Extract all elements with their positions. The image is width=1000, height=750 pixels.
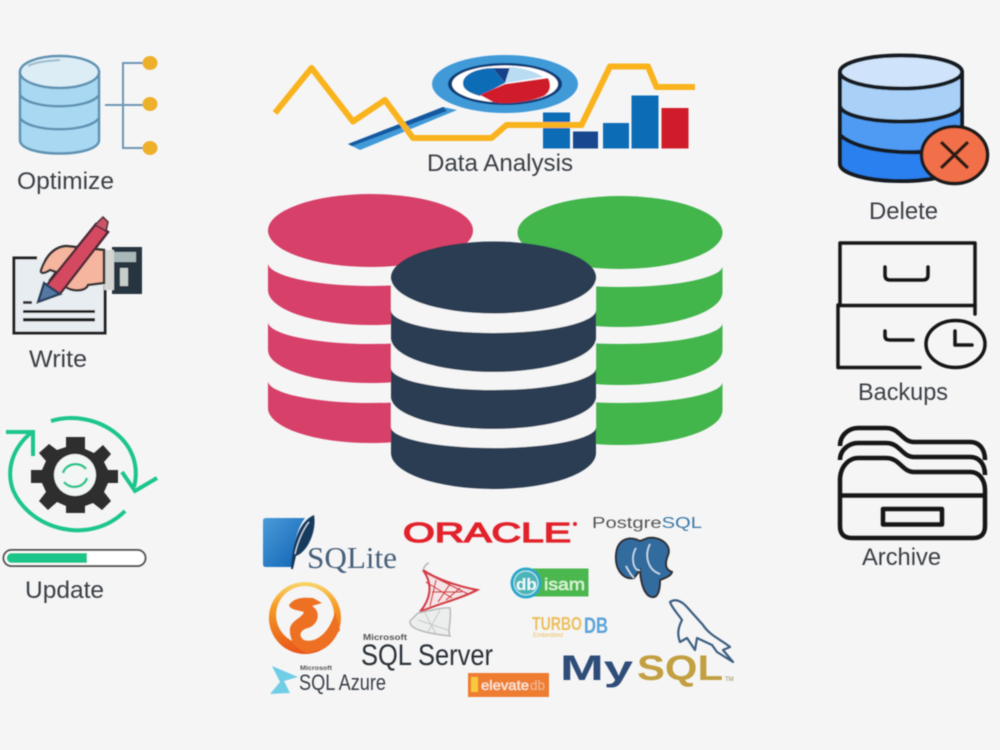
database: green cylinder <box>518 196 722 445</box>
logo: MySQL dolphin <box>670 600 733 662</box>
logo: SQLite: SQLite <box>307 540 397 575</box>
logo: ElevateDB <box>468 673 549 697</box>
logo: TurboDB: TURBO <box>532 614 582 634</box>
database: dark navy cylinder <box>391 242 596 489</box>
icon: delete database <box>840 56 988 184</box>
logo: MySQL <box>560 649 734 688</box>
logo: TurboDB <box>532 613 608 639</box>
logo: MySQL: My <box>560 649 634 688</box>
label: Archive: Archive <box>862 544 941 571</box>
icon: backups cabinet <box>838 243 985 368</box>
icon: write <box>14 217 142 333</box>
logo: TurboDB: Embedded <box>533 633 563 639</box>
logo: SQL Azure: SQL Azure <box>299 670 386 695</box>
icon: optimize database <box>20 56 158 155</box>
logo: SQL Azure <box>270 666 386 695</box>
logo: SQL Server mark <box>410 563 477 636</box>
logo: PostgreSQL <box>592 515 702 597</box>
logo: db isam <box>510 568 588 598</box>
logo: db isam: db <box>516 575 537 594</box>
label: Backups: Backups <box>858 379 948 406</box>
logo: MySQL: TM <box>725 677 734 683</box>
logo: SQLite <box>263 515 397 575</box>
logo: ElevateDB: db <box>530 677 545 693</box>
label: Optimize: Optimize <box>17 168 114 195</box>
logo: SQL Server wordmark: SQL Server <box>361 639 493 672</box>
logo: Firebird <box>269 582 341 654</box>
logo: MySQL: SQL <box>637 649 723 688</box>
logo: SQL Server wordmark: Microsoft <box>363 632 407 642</box>
logo: TurboDB: DB <box>584 613 608 638</box>
label: Delete: Delete <box>869 198 938 225</box>
logo: Oracle: ORACLE <box>403 517 571 548</box>
icon: update gear <box>6 418 157 530</box>
database: red cylinder <box>268 194 473 443</box>
progress bar <box>4 550 146 566</box>
label: Update: Update <box>25 577 104 604</box>
logo: Oracle <box>403 517 577 548</box>
logo: db isam: isam <box>544 575 585 594</box>
logo: ElevateDB: elevate <box>481 677 529 693</box>
chart: data analysis illustration <box>275 55 695 150</box>
logo: PostgreSQL: Postgre SQL <box>592 515 702 532</box>
logo: SQL Azure: Microsoft <box>300 666 332 672</box>
icon: archive folders <box>840 428 985 538</box>
label: Data Analysis: Data Analysis <box>427 150 573 177</box>
label: Write: Write <box>29 346 87 373</box>
